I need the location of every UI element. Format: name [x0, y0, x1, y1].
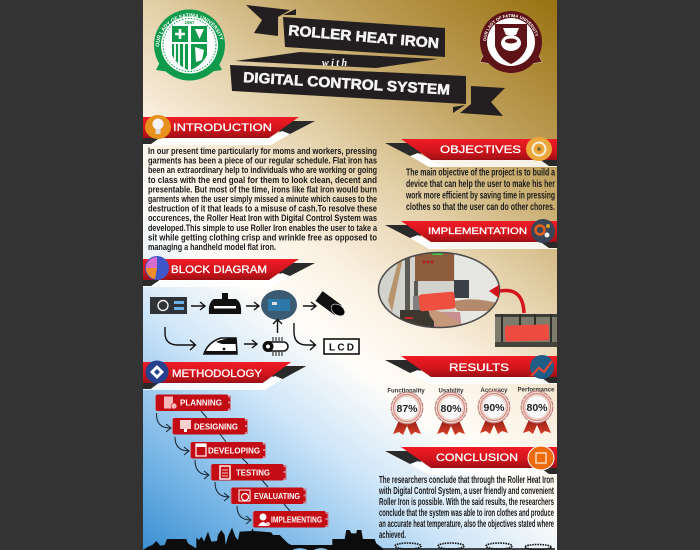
- step: planning: [155, 394, 231, 411]
- icon: LCD: LCD: [329, 342, 354, 354]
- step: planning: PLANNING: [180, 398, 222, 408]
- badge: functionality: [387, 388, 425, 435]
- icon: flat iron: [204, 338, 237, 354]
- curved arrow: [165, 327, 196, 350]
- icon: control panel: [150, 297, 187, 314]
- text block: objectives: [405, 168, 555, 213]
- badge: functionality: Functionality: [387, 388, 425, 394]
- section header: Conclusion: [385, 446, 557, 475]
- section header: Methodology: METHODOLOGY: [172, 368, 263, 380]
- badge: usability: Usability: [438, 388, 464, 394]
- section header: Results: [385, 355, 557, 384]
- background panel: [143, 0, 557, 550]
- step: evaluating: [230, 488, 306, 504]
- icon: light bulb: [145, 115, 171, 139]
- text block: introduction: presentable. But most of the time, irons like flat iron would burn: [148, 183, 377, 194]
- arrow: red curved: [489, 285, 524, 313]
- step: designing: [172, 418, 248, 434]
- step: designing: DESIGNING: [194, 422, 238, 432]
- section header: Implementation: [385, 219, 557, 249]
- badge: usability: [435, 388, 467, 435]
- section header: Implementation: IMPLEMENTATION: [428, 226, 527, 237]
- badge: performance: [518, 388, 555, 434]
- icon: growth chart: [530, 355, 554, 379]
- step: testing: TESTING: [236, 468, 270, 478]
- title line: Roller Heat Iron: ROLLER HEAT IRON: [288, 23, 439, 52]
- icon: gears: [531, 219, 555, 243]
- section header: Introduction: [143, 115, 315, 145]
- text block: objectives: work more efficient by saving time in pressing: [405, 190, 555, 202]
- badge: usability: 80%: [440, 403, 462, 415]
- text block: introduction: managing a handheld model flat iron.: [148, 241, 276, 252]
- badge: functionality: 87%: [396, 403, 418, 415]
- text block: introduction: developed.This simple to use Roller Iron enables the user to take a: [148, 222, 378, 233]
- arrow: [303, 302, 316, 310]
- step: evaluating: EVALUATING: [254, 491, 300, 501]
- section header: Introduction: INTRODUCTION: [173, 122, 272, 134]
- text block: conclusion: conclude that the system was able to iron clothes and produce: [379, 508, 554, 519]
- icon: roller: [319, 296, 347, 318]
- text block: conclusion: an accurate heat temperature, also the objectives stated where: [379, 519, 554, 530]
- logo: Our Lady of Fatima University green seal: OUR LADY OF FATIMA UNIVERSITY: [156, 13, 224, 47]
- logo: maroon college seal: OUR LADY OF FATIMA UNIVERSITY: [483, 14, 538, 41]
- logo: Our Lady of Fatima University green seal: 1967: [184, 20, 195, 25]
- methodology flow: [155, 394, 328, 528]
- arrow: [273, 320, 282, 333]
- badge: accuracy: 90%: [483, 402, 505, 414]
- arrow: [244, 340, 257, 348]
- connector arrows: [156, 411, 290, 524]
- logo: Our Lady of Fatima University green seal: [154, 10, 225, 80]
- section header: Results: RESULTS: [449, 362, 509, 374]
- title line: Digital Control System: DIGITAL CONTROL SYSTEM: [243, 70, 450, 99]
- badge: accuracy: [478, 388, 510, 434]
- section header: Methodology: [143, 360, 306, 390]
- text block: objectives: device that can help the user to make his her: [406, 179, 555, 190]
- text block: objectives: The main objective of the project is to build a: [406, 168, 555, 178]
- section header: Objectives: [385, 137, 557, 167]
- results badges: [387, 388, 555, 435]
- section header: Objectives: OBJECTIVES: [440, 144, 521, 156]
- icon: clipboard: [528, 446, 554, 470]
- section header: Conclusion: CONCLUSION: [436, 452, 518, 464]
- icon: power supply: [209, 293, 241, 314]
- step: developing: DEVELOPING: [208, 446, 260, 456]
- section header: Block Diagram: BLOCK DIAGRAM: [171, 264, 267, 276]
- title ribbon: [230, 5, 505, 116]
- step: implementing: [252, 511, 328, 528]
- photo: roller close-up: [495, 314, 557, 347]
- photo: roller device: [378, 250, 500, 330]
- text block: conclusion: achieved.: [379, 530, 406, 541]
- badge: accuracy: Accuracy: [480, 388, 508, 394]
- curved arrow: [294, 323, 316, 350]
- step: developing: [190, 442, 266, 458]
- text block: conclusion: with Digital Control System, a user friendly and convenient: [378, 486, 554, 497]
- arrow: [246, 302, 259, 310]
- logo: maroon college seal: [480, 11, 542, 73]
- icon: temperature sensor: [262, 337, 288, 356]
- arrow: [191, 302, 205, 310]
- icon: diamonds: [146, 360, 168, 384]
- text block: introduction: to class with the end goal for them to look clean, decent and: [148, 174, 377, 185]
- text block: introduction: garments when the user simply missed a minute which causes to the: [148, 193, 377, 204]
- step: testing: [210, 464, 286, 480]
- text block: conclusion: Roller Iron is possible. With the said results, the researchers: [379, 497, 554, 508]
- text block: introduction: [148, 145, 378, 252]
- icon: LCD: [324, 339, 359, 354]
- section header: Block Diagram: [143, 256, 315, 287]
- badge: performance: Performance: [518, 388, 555, 394]
- text block: introduction: garments has been a piece of our regular schedule. Flat iron has: [148, 155, 377, 166]
- text block: introduction: been an extraordinary help to individuals who are working or going: [148, 164, 377, 175]
- icon: target: [526, 137, 552, 161]
- text block: conclusion: [378, 475, 554, 541]
- text block: introduction: sit while getting clothing crisp and wrinkle free as opposed to: [148, 231, 377, 242]
- text block: introduction: occurences, the Roller Heat Iron with Digital Control System was: [148, 212, 377, 223]
- title line: with: with: [322, 58, 347, 69]
- text block: conclusion: The researchers conclude that through the Roller Heat Iron: [379, 475, 554, 486]
- text block: introduction: destruction of it that leads to a misuse of cash.To resolve these: [148, 203, 377, 214]
- icon: pie chart: [145, 256, 169, 280]
- skyline silhouette: [143, 528, 383, 550]
- decorative bridge: [383, 543, 555, 550]
- block diagram: [150, 290, 359, 356]
- text block: introduction: In our present time particularly for moms and workers, pressing: [148, 145, 377, 156]
- step: implementing: IMPLEMENTING: [271, 514, 322, 524]
- icon: microcontroller board: [261, 290, 297, 320]
- badge: performance: 80%: [526, 402, 548, 414]
- text block: objectives: clothes so that the user can do other chores.: [406, 202, 555, 213]
